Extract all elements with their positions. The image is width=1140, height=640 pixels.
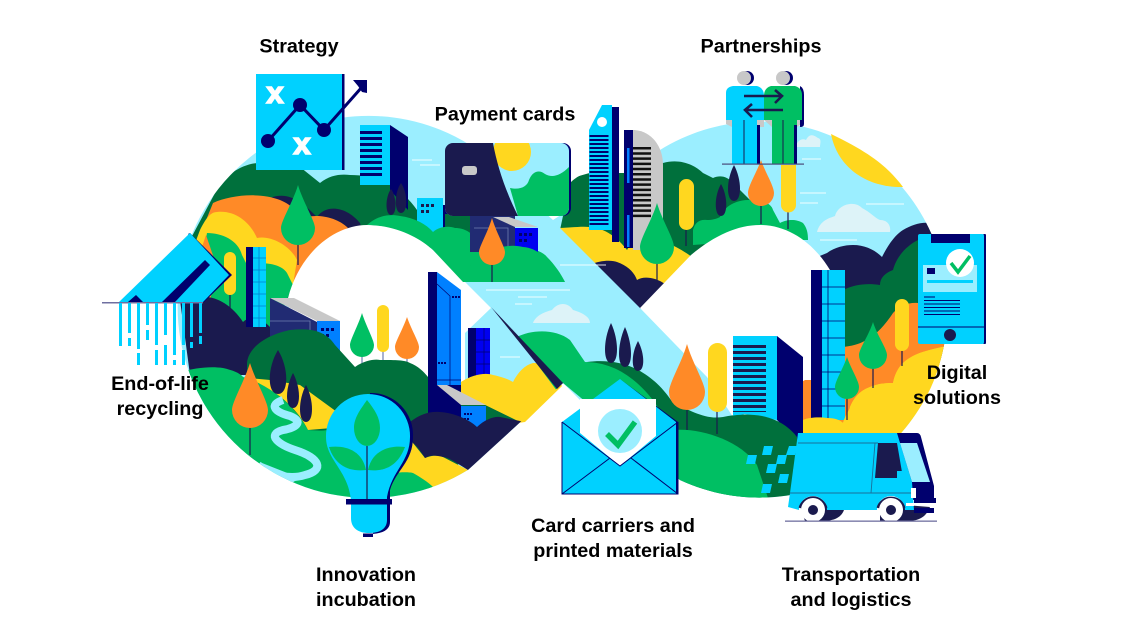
pill tree left	[224, 252, 236, 312]
dark hill in front of building	[723, 415, 800, 490]
heading: transportation: and logistics	[791, 589, 911, 611]
icon: strategy chart	[256, 74, 367, 170]
dark green patch under card	[445, 214, 492, 240]
icon: light bulb	[326, 393, 413, 537]
tower left	[246, 247, 266, 327]
tree: orange center	[669, 344, 705, 430]
heading: card carriers: printed materials	[533, 540, 693, 562]
heading: digital solutions: solutions	[913, 387, 1001, 409]
building: center right	[733, 336, 803, 445]
heading: digital solutions: Digital	[927, 362, 987, 384]
pill tree top right	[781, 165, 796, 229]
infinity loop landscape	[178, 105, 955, 510]
bright green hill	[518, 331, 660, 410]
tower right	[811, 270, 845, 420]
heading: transportation: Transportation	[782, 564, 920, 586]
building in band	[470, 216, 538, 254]
yellow under trees	[256, 378, 335, 430]
icon: envelope	[562, 379, 678, 494]
low building left	[270, 298, 340, 352]
heading: end-of-life recycling: End-of-life	[111, 373, 209, 395]
icon: strategy chart: x	[293, 126, 311, 161]
pill tree center	[708, 343, 727, 434]
towers top center	[589, 105, 619, 242]
clouds	[533, 135, 890, 323]
yellow hill behind bulb	[398, 442, 468, 489]
background hills	[180, 161, 955, 440]
icon: partners	[722, 71, 804, 165]
icon: small building	[417, 198, 451, 233]
dark green hill lower left	[247, 329, 520, 470]
heading: innovation incubation: Innovation	[316, 564, 416, 586]
tree: orange lower left	[232, 363, 268, 455]
navy trees	[386, 183, 406, 215]
trees right	[835, 299, 909, 420]
icon: payment card	[445, 143, 571, 216]
sun upper right	[831, 134, 903, 187]
tree: orange in band	[479, 218, 505, 282]
lower hills	[188, 367, 522, 497]
heading: strategy: Strategy	[259, 36, 339, 58]
green base hill	[188, 367, 433, 497]
icon: delivery van	[785, 433, 937, 522]
tree: orange top right	[748, 160, 774, 224]
navy hill center	[410, 412, 525, 470]
icon: pixels	[746, 446, 801, 493]
tree: green upper left	[281, 185, 315, 265]
diagonal sky band	[433, 221, 733, 470]
yellow hills lower center	[458, 363, 562, 430]
lower center building	[428, 385, 486, 440]
tree: green top center	[640, 203, 674, 281]
band decorations	[412, 159, 904, 357]
gray tower	[624, 130, 663, 250]
pill tree top center	[679, 179, 694, 246]
navy trees in band	[605, 323, 643, 371]
sliver at crossing	[491, 307, 563, 389]
heading: end-of-life recycling: recycling	[117, 398, 203, 420]
trees in left hole	[350, 305, 419, 366]
heading: payment cards: Payment cards	[435, 104, 575, 126]
sky background	[178, 116, 947, 498]
dark green lower hill	[587, 361, 798, 498]
navy trees top right	[716, 165, 740, 216]
icon: phone	[918, 234, 986, 344]
bright green lower hill	[678, 430, 768, 498]
heading: innovation incubation: incubation	[316, 589, 416, 611]
lower right hills	[518, 331, 798, 498]
green hill cover	[463, 246, 565, 282]
building: top left tower	[360, 125, 408, 210]
heading: partnerships: Partnerships	[701, 36, 821, 58]
icon: recycling card	[102, 233, 232, 365]
yellow hill front right	[803, 347, 943, 450]
tall blue building	[428, 272, 461, 422]
navy leaf trees lower left	[270, 350, 312, 422]
white holes of the infinity loop	[288, 225, 830, 420]
green hill with flat base	[367, 215, 565, 282]
icon: strategy chart: x	[266, 75, 284, 110]
second blue building	[468, 328, 490, 408]
river	[258, 400, 317, 477]
heading: card carriers: Card carriers and	[531, 515, 695, 537]
